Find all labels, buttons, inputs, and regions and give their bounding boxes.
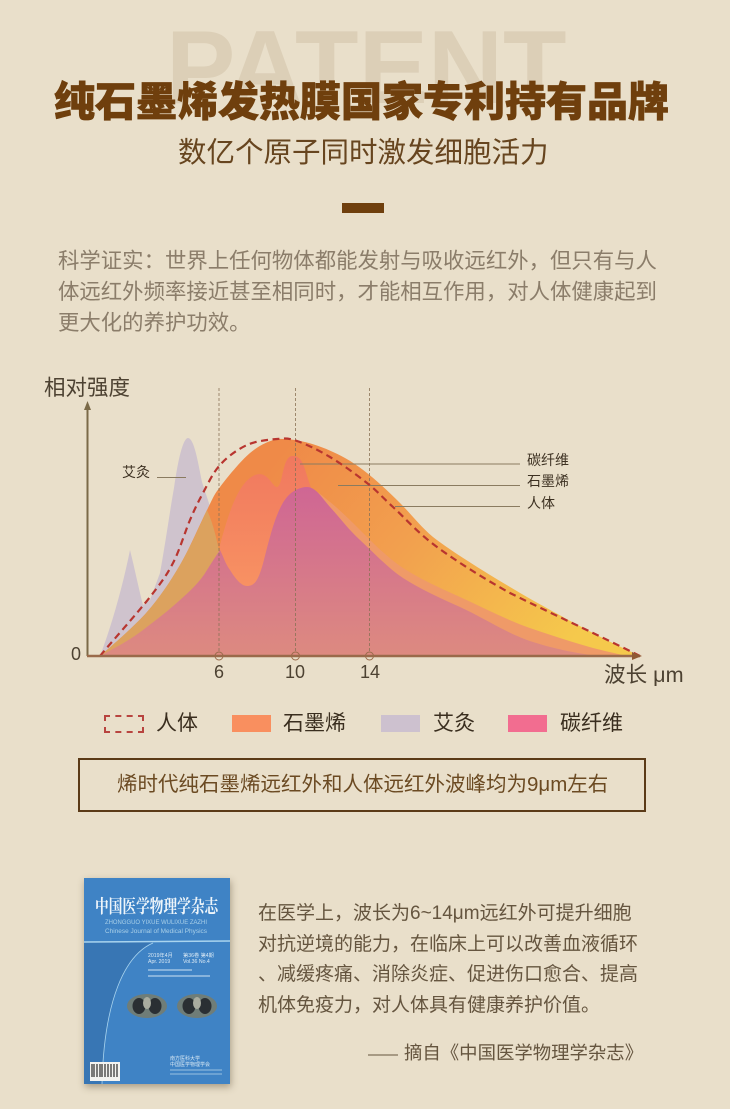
subtitle: 数亿个原子同时激发细胞活力 bbox=[178, 137, 549, 169]
issue info: 第36卷 第4期 bbox=[183, 951, 214, 959]
curve labels: 石墨烯 bbox=[527, 473, 569, 489]
body text: medical note: 、减缓疼痛、消除炎症、促进伤口愈合、提高 bbox=[258, 964, 638, 985]
body text: medical note: 在医学上，波长为6~14μm远红外可提升细胞 bbox=[258, 903, 632, 924]
chart: relative intensity vs wavelength bbox=[44, 376, 684, 687]
graphene lower-left shade bbox=[100, 510, 222, 656]
intro text block: 科学证实：世界上任何物体都能发射与吸收远红外，但只有与人 bbox=[58, 249, 657, 273]
journal cover bbox=[84, 878, 230, 1084]
axes bbox=[84, 401, 642, 660]
axis labels: 14 bbox=[360, 662, 380, 682]
publisher info: 南方医科大学 bbox=[170, 1055, 200, 1062]
heading accent bar bbox=[342, 203, 384, 213]
issue info bbox=[148, 951, 214, 965]
curve labels bbox=[122, 452, 569, 511]
CT scan images bbox=[127, 994, 217, 1018]
area: carbon fiber bbox=[100, 456, 600, 656]
carbon fiber upper hump bbox=[220, 456, 312, 610]
axis labels: 相对强度 bbox=[44, 376, 130, 400]
cover title: 中国医学物理学杂志 bbox=[95, 896, 220, 918]
legend label: moxibustion: 艾灸 bbox=[433, 712, 475, 735]
reference lines at 6, 10, 14 bbox=[219, 388, 370, 652]
intro text block: 体远红外频率接近甚至相同时，才能相互作用，对人体健康起到 bbox=[58, 280, 657, 304]
intro text block: 更大化的养护功效。 bbox=[58, 311, 251, 335]
issue info: Apr. 2019 bbox=[148, 959, 170, 965]
title: 纯石墨烯发热膜国家专利持有品牌 bbox=[54, 79, 669, 125]
axis labels bbox=[44, 376, 684, 687]
legend: human body bbox=[104, 715, 144, 733]
source attribution: —— 摘自《中国医学物理学杂志》 bbox=[368, 1042, 643, 1063]
dashed curve: human body bbox=[100, 439, 640, 656]
legend: moxibustion bbox=[381, 715, 420, 732]
publisher info: 中国医学物理学会 bbox=[170, 1061, 210, 1068]
callout box bbox=[78, 758, 646, 812]
legend bbox=[104, 712, 623, 735]
issue info: Vol.36 No.4 bbox=[183, 959, 210, 965]
body text: medical note: 对抗逆境的能力，在临床上可以改善血液循环 bbox=[258, 934, 638, 954]
axis labels: 6 bbox=[214, 662, 224, 682]
legend label: carbon fiber: 碳纤维 bbox=[560, 712, 623, 735]
curve labels: 人体 bbox=[527, 495, 555, 511]
axis labels: 0 bbox=[71, 644, 81, 664]
intro text block bbox=[58, 249, 657, 335]
barcode bbox=[90, 1062, 120, 1081]
axis labels: 波长 μm bbox=[604, 662, 684, 687]
tick markers bbox=[215, 652, 374, 660]
legend label: graphene: 石墨烯 bbox=[283, 712, 346, 735]
cover subtitle bbox=[105, 920, 208, 935]
axis labels: 10 bbox=[285, 662, 305, 682]
area: graphene bbox=[100, 439, 640, 656]
issue info: 2019年4月 bbox=[148, 951, 173, 959]
carbon fiber body bbox=[100, 487, 600, 656]
publisher info bbox=[170, 1055, 210, 1068]
cover subtitle: ZHONGGUO YIXUE WULIXUE ZAZHI bbox=[105, 920, 207, 926]
area: moxibustion bbox=[100, 438, 214, 656]
body text: medical note: 机体免疫力，对人体具有健康养护价值。 bbox=[258, 994, 600, 1016]
cover subtitle: Chinese Journal of Medical Physics bbox=[105, 928, 208, 935]
graphene lower-right band bbox=[300, 487, 627, 656]
callout text: 烯时代纯石墨烯远红外和人体远红外波峰均为9μm左右 bbox=[117, 773, 608, 796]
body text: medical note bbox=[258, 902, 638, 1016]
background watermark: PATENT: PATENT bbox=[166, 10, 567, 126]
legend label: human body: 人体 bbox=[156, 712, 198, 735]
curve labels: 碳纤维 bbox=[527, 452, 569, 468]
legend: graphene bbox=[232, 715, 271, 732]
leader lines bbox=[157, 464, 520, 506]
cover background bbox=[84, 878, 230, 1084]
legend: carbon fiber bbox=[508, 715, 547, 732]
curve labels: 艾灸 bbox=[122, 464, 150, 480]
